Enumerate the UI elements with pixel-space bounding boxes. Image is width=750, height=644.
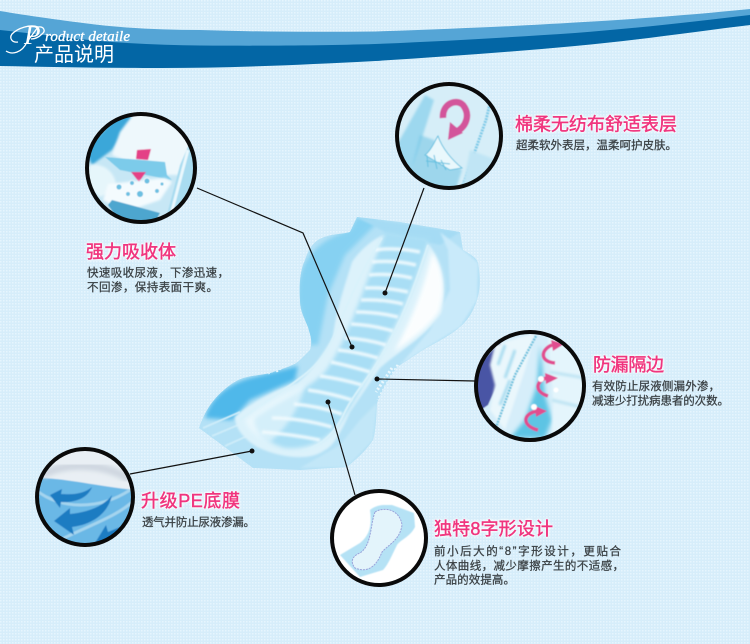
pad lower-left strip lines (202, 410, 245, 447)
text: figure-8 design (434, 544, 624, 586)
pad elastic gathers (268, 364, 399, 400)
text: PE backsheet: 透气并防止尿液渗漏。 (142, 515, 255, 529)
script heading text: P (23, 20, 40, 50)
line to absorbent core (197, 188, 352, 347)
pad left wing bottom (205, 366, 298, 420)
text: absorbent core: 快速吸收尿液，下渗迅速， (87, 266, 229, 280)
pad right core highlight (394, 252, 443, 352)
pad lower wing (304, 406, 376, 468)
header banner (0, 9, 750, 68)
pad absorbent core (235, 235, 444, 457)
script capital letter swash (6, 26, 44, 53)
icon: top sheet circle (394, 82, 506, 194)
pad outer shape (199, 217, 480, 470)
line to top sheet (385, 188, 424, 293)
icon: absorbent core circle (85, 112, 198, 224)
anchor dots (250, 290, 388, 454)
icon: leak guard circle (474, 330, 586, 442)
text: top sheet: 超柔软外表层，温柔呵护皮肤。 (516, 138, 677, 152)
text: leak guard: 有效防止尿液侧漏外渗， (592, 379, 720, 393)
pad lower lobe highlight (245, 385, 305, 442)
line to figure-8 design (328, 402, 355, 495)
icon: figure-8 design circle (332, 491, 426, 585)
text: figure-8 design: 人体曲线，减少摩擦产生的不适感， (434, 558, 624, 572)
text: figure-8 design: 前小后大的“8”字形设计，更贴合 (434, 544, 622, 558)
pad ribs (262, 249, 420, 440)
mini pad core (352, 509, 402, 570)
text: absorbent core: 不回渗，保持表面干爽。 (87, 280, 218, 294)
leader lines (130, 188, 475, 495)
icon: PE backsheet circle (36, 448, 136, 548)
line to leak guard (377, 379, 475, 381)
pad edge stitching (240, 238, 428, 452)
line to PE backsheet (130, 451, 252, 474)
banner light band (0, 9, 750, 66)
banner dark band (0, 15, 750, 68)
pad top band (362, 219, 458, 244)
banner chinese title: 产品说明 (34, 43, 114, 66)
heading: top sheet: 棉柔无纺布舒适表层 (515, 114, 677, 134)
pad right wing (400, 232, 478, 365)
pad center channel (255, 232, 430, 448)
text: leak guard (592, 379, 729, 408)
product: adult pad (199, 217, 480, 470)
heading: absorbent core: 强力吸收体 (86, 242, 176, 262)
banner script heading (6, 20, 130, 53)
heading: PE backsheet: 升级PE底膜 (141, 491, 240, 511)
text: leak guard: 减速少打扰病患者的次数。 (592, 394, 729, 408)
text: absorbent core (87, 266, 229, 294)
pad left wing top (298, 217, 378, 345)
heading: leak guard: 防漏隔边 (593, 355, 664, 375)
script heading words: roduct detaile (45, 29, 130, 45)
mini pad outline (340, 505, 415, 577)
text: figure-8 design: 产品的效提高。 (434, 572, 515, 586)
heading: figure-8 design: 独特8字形设计 (434, 519, 553, 539)
